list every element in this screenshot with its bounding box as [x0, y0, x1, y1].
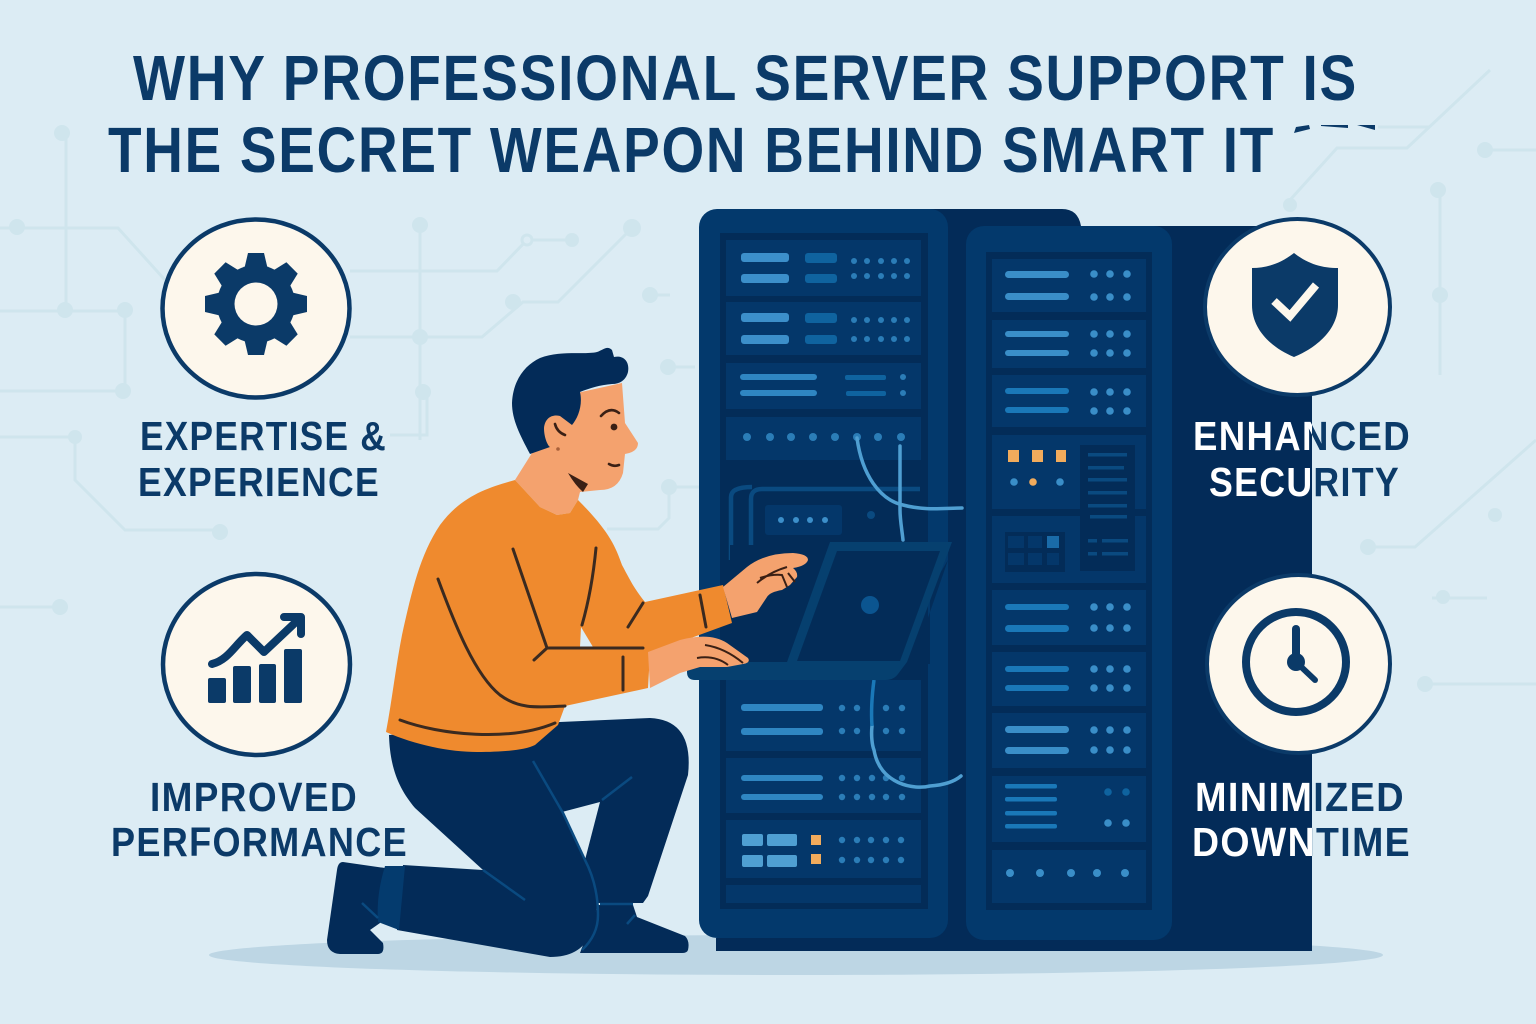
title: THE SECRET WEAPON BEHIND SMART IT — [108, 114, 1275, 186]
panel: improved performance — [111, 574, 408, 865]
label: SECURITY — [1209, 459, 1400, 505]
label — [138, 413, 387, 505]
label — [1193, 413, 1411, 505]
hands — [648, 553, 808, 688]
left rack — [699, 209, 948, 938]
label: ENHANCED — [1193, 413, 1411, 459]
label: IMPROVED — [150, 774, 358, 820]
head — [512, 348, 638, 515]
label: EXPERIENCE — [138, 459, 380, 505]
cables — [857, 438, 962, 787]
man kneeling — [327, 348, 808, 957]
laptop — [687, 542, 952, 680]
ground shadow — [209, 935, 1383, 975]
title: WHY PROFESSIONAL SERVER SUPPORT IS — [133, 42, 1358, 114]
server racks — [687, 209, 1312, 951]
orange sweater — [386, 480, 732, 752]
label — [1192, 774, 1411, 865]
label: DOWNTIME — [1192, 819, 1411, 865]
label: MINIMIZED — [1195, 774, 1405, 820]
label: EXPERTISE & — [140, 413, 387, 459]
icon: shield — [1205, 219, 1390, 395]
label: PERFORMANCE — [111, 819, 408, 865]
icon: clock — [1207, 575, 1390, 753]
rack back body — [716, 209, 1312, 951]
panel: enhanced security — [1193, 219, 1411, 505]
icon: growth chart — [163, 574, 350, 755]
panel: minimized downtime — [1192, 575, 1411, 865]
icon: gear — [162, 220, 350, 398]
legs — [327, 718, 689, 957]
right rack — [966, 226, 1172, 940]
panel: expertise & experience — [138, 220, 387, 505]
label — [111, 774, 408, 865]
title — [108, 42, 1375, 186]
